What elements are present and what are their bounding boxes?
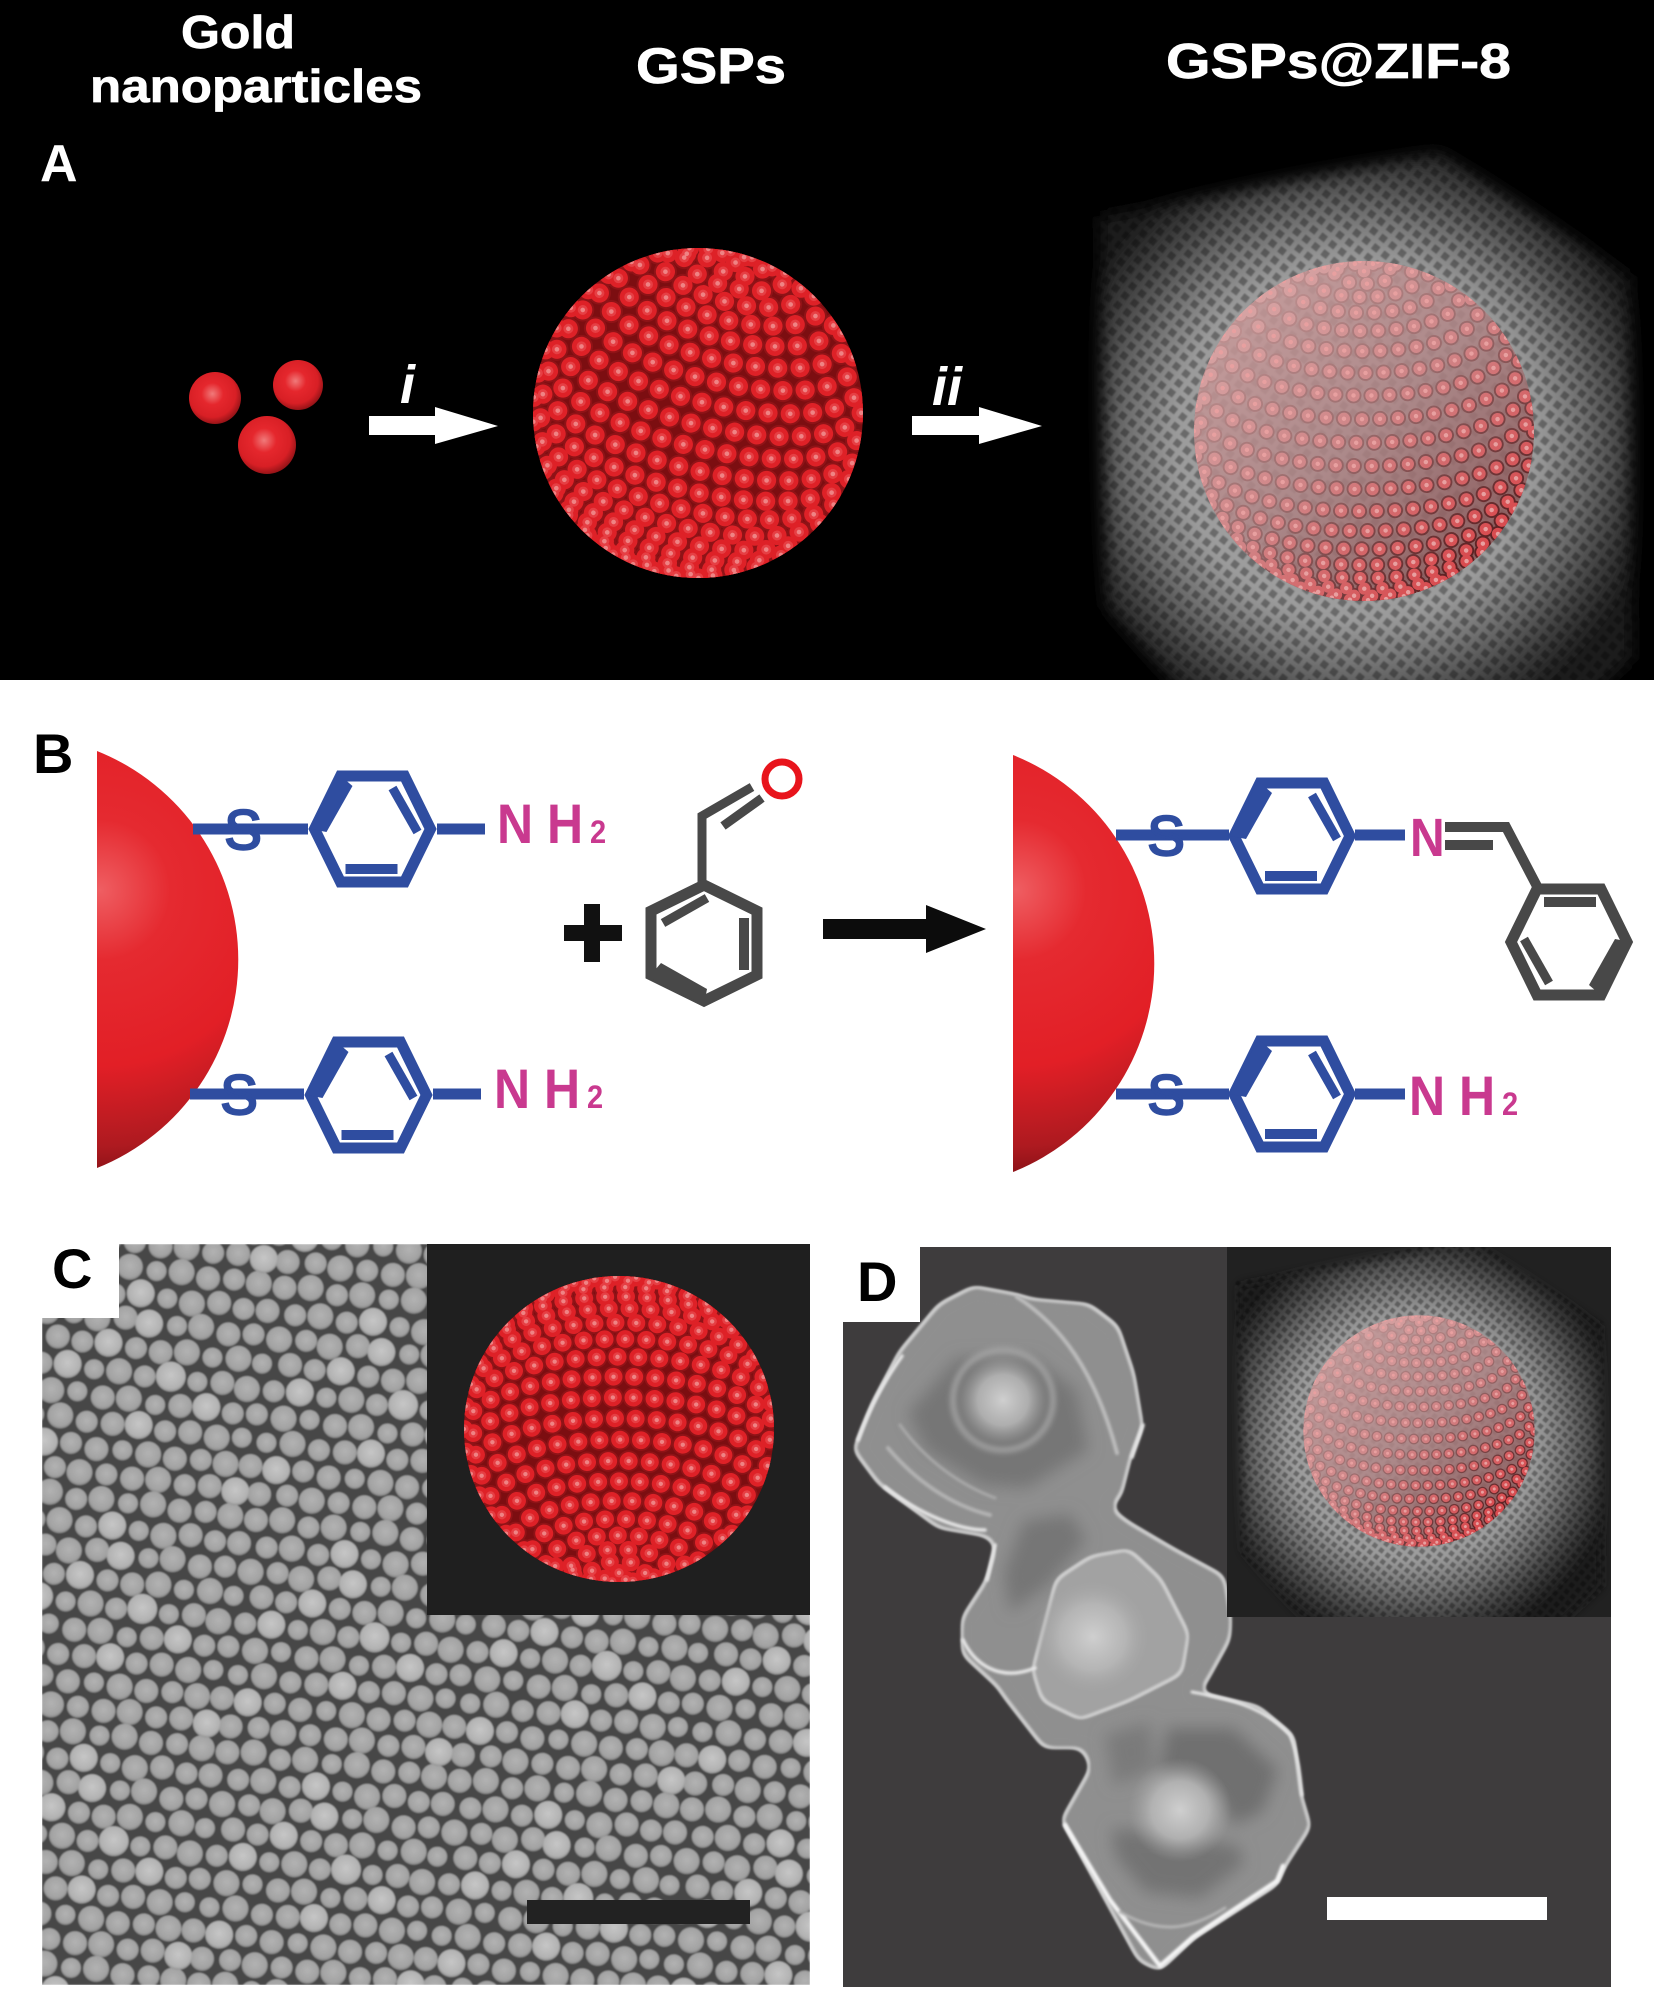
panel D: SEM of GSPs@ZIF-8 crystals <box>838 1237 1611 1987</box>
scale bar C <box>527 1900 750 1924</box>
inset: ZIF-8 coated sphere <box>1227 1237 1611 1638</box>
label ii: ii <box>932 357 963 417</box>
amine ligand top left: 2 <box>590 813 606 850</box>
scale bar D <box>1327 1897 1547 1920</box>
panel letter A: A <box>40 135 78 193</box>
label patch and letter D: D <box>857 1250 897 1313</box>
label patch and letter C: C <box>52 1237 92 1300</box>
GSPs@ZIF-8 crystal <box>1094 146 1638 736</box>
crystal faces <box>908 1358 1278 1898</box>
panel B: imine reaction scheme <box>33 722 1631 1172</box>
reaction arrow <box>823 905 986 953</box>
arrow i <box>369 407 498 444</box>
amine ligand bottom right: H <box>1459 1065 1495 1128</box>
imine ligand top right: S <box>1147 804 1185 867</box>
left gold hemisphere <box>97 751 238 1168</box>
amine ligand bottom left: H <box>544 1058 580 1121</box>
panel C: TEM of gold spheres <box>36 1237 810 1985</box>
benzaldehyde molecule <box>649 762 799 1005</box>
heading: Gold nanoparticles: Gold <box>181 6 295 58</box>
heading: Gold nanoparticles: nanoparticles <box>90 60 422 112</box>
bright crystal cores <box>953 1350 1232 1862</box>
amine ligand bottom left: 2 <box>587 1078 603 1115</box>
SEM background <box>843 1247 1611 1987</box>
amine ligand bottom right: S <box>1147 1063 1185 1126</box>
amine ligand bottom left: N <box>494 1058 530 1121</box>
label i: i <box>400 355 416 415</box>
amine ligand bottom right: N <box>1409 1065 1445 1128</box>
inset: GSP sphere <box>427 1244 810 1615</box>
GSP sphere <box>498 213 898 613</box>
panel A: synthesis scheme <box>0 0 1654 736</box>
crystal 2 front lobe <box>1031 1548 1190 1721</box>
label patch and letter C <box>36 1237 119 1318</box>
amine ligand bottom left <box>190 1040 603 1148</box>
heading: GSPs: GSPs <box>636 38 786 94</box>
amine ligand top left: N <box>497 793 533 856</box>
bright edges <box>858 1297 1302 1966</box>
amine ligand bottom right: 2 <box>1502 1085 1518 1122</box>
icon: plus sign <box>564 904 622 962</box>
amine ligand bottom left: S <box>220 1063 258 1126</box>
panel letter B: B <box>33 722 73 785</box>
heading: GSPs@ZIF-8: GSPs@ZIF-8 <box>1166 35 1511 89</box>
label patch and letter D <box>838 1242 920 1322</box>
heading: Gold nanoparticles <box>90 6 422 112</box>
imine ligand top right <box>1116 781 1631 997</box>
amine ligand top left: S <box>224 798 262 861</box>
arrow ii <box>912 407 1042 444</box>
icon: three gold nanoparticles <box>189 360 323 474</box>
amine ligand bottom right <box>1116 1039 1518 1147</box>
right gold hemisphere <box>1013 755 1154 1172</box>
amine ligand top left <box>193 774 606 882</box>
TEM micrograph <box>42 1244 810 1985</box>
amine ligand top left: H <box>547 793 583 856</box>
imine ligand top right: N <box>1410 807 1445 868</box>
crystals micrograph <box>852 1285 1312 1972</box>
